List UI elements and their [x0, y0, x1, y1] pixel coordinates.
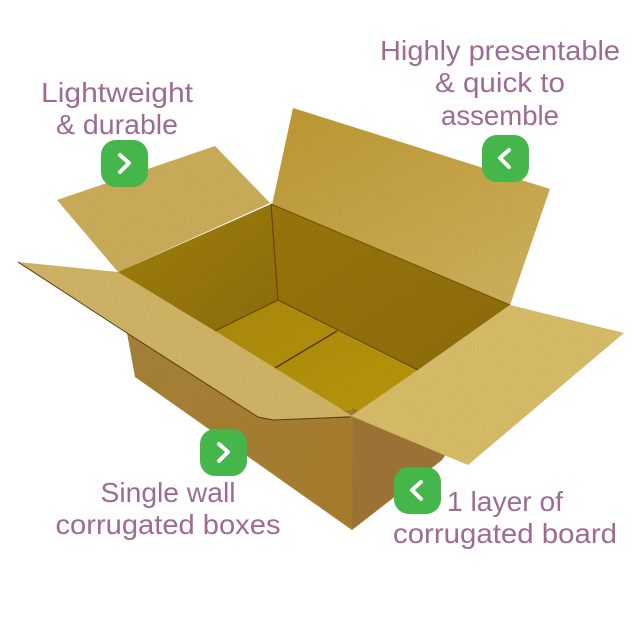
front outer wall [127, 333, 353, 530]
right outer wall [352, 408, 450, 530]
icon: left chevron button [394, 467, 441, 514]
callout: lightweight and durable [41, 77, 193, 187]
callout: lightweight and durable: & durable [56, 109, 178, 140]
right flap [351, 305, 624, 465]
callout: single wall [56, 429, 280, 540]
back flap [272, 108, 550, 305]
callout: highly presentable: Highly presentable [380, 35, 620, 66]
callout: single wall: Single wall [100, 477, 236, 508]
box floor [215, 204, 510, 416]
front flap [18, 262, 352, 420]
callout: highly presentable: assemble [441, 100, 559, 131]
left flap [57, 146, 270, 272]
callout: one layer: 1 layer of [447, 486, 563, 517]
icon: right chevron button [200, 429, 247, 476]
callout: highly presentable [380, 35, 620, 182]
callout: one layer [393, 467, 617, 549]
callout: lightweight and durable: Lightweight [41, 77, 193, 108]
icon: left chevron button [482, 135, 529, 182]
callout: single wall: corrugated boxes [56, 509, 280, 540]
callout: highly presentable: & quick to [435, 67, 565, 98]
interior left wall [118, 204, 278, 331]
interior back wall [271, 204, 510, 370]
box illustration [18, 108, 624, 530]
icon: right chevron button [101, 140, 148, 187]
callout: one layer: corrugated board [393, 518, 617, 549]
